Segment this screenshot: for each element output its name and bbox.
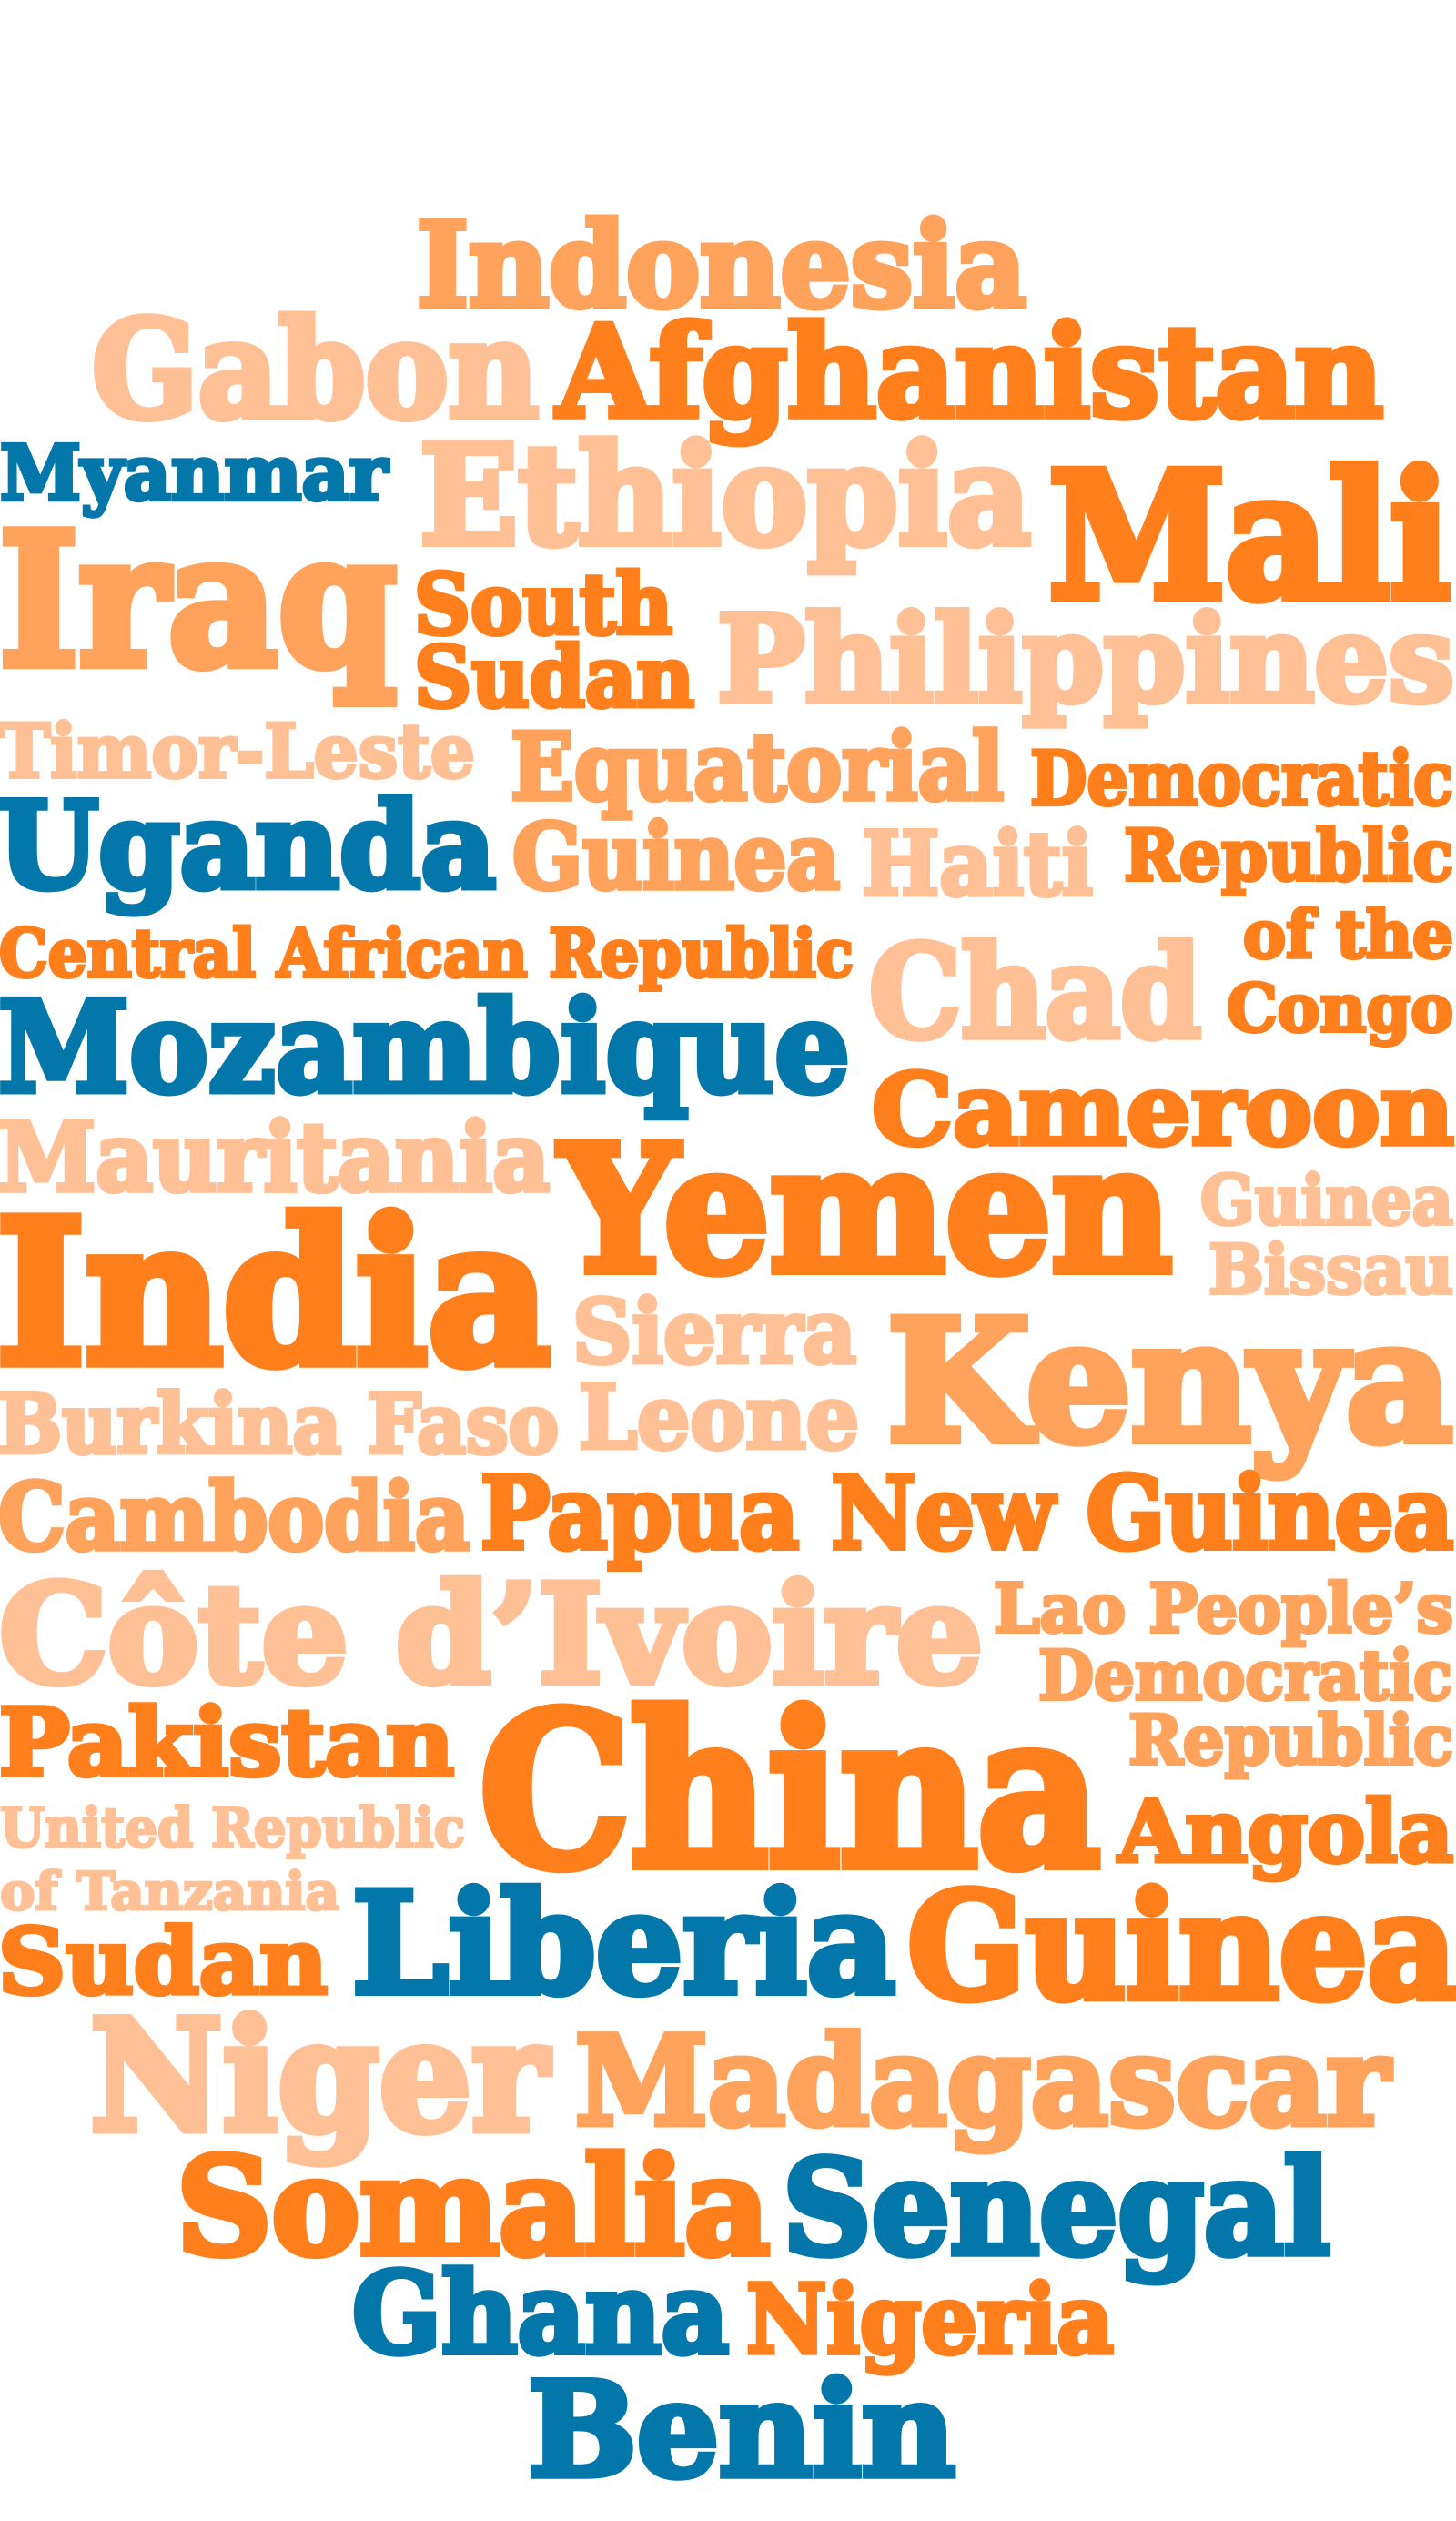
word: Uganda: Uganda <box>0 775 496 916</box>
word: Yemen: Yemen <box>558 1108 1172 1312</box>
word: Chad: Chad <box>869 918 1201 1068</box>
word: China: China <box>480 1668 1100 1915</box>
word: Congo: Congo <box>1227 969 1453 1047</box>
word: Central African Republic: Central African Republic <box>0 915 854 993</box>
word: of the: of the <box>1243 896 1453 973</box>
word: Iraq: Iraq <box>0 493 397 708</box>
word: Senegal: Senegal <box>783 2131 1330 2284</box>
word: Haiti: Haiti <box>862 813 1093 916</box>
word: Burkina Faso: Burkina Faso <box>0 1376 559 1473</box>
word: Philippines: Philippines <box>717 589 1454 729</box>
word: Benin: Benin <box>528 2354 956 2506</box>
word: Niger: Niger <box>90 1986 550 2166</box>
word: Cambodia: Cambodia <box>0 1463 470 1571</box>
word: Cameroon: Cameroon <box>872 1053 1454 1168</box>
word: Mozambique: Mozambique <box>0 973 850 1121</box>
word: Ghana: Ghana <box>352 2249 729 2380</box>
word: South: South <box>414 555 672 653</box>
word: Equatorial: Equatorial <box>511 713 1004 821</box>
word: Nigeria: Nigeria <box>746 2263 1114 2375</box>
word: Somalia: Somalia <box>177 2128 770 2285</box>
word: Liberia: Liberia <box>352 1862 895 2026</box>
word: Leone: Leone <box>579 1366 859 1469</box>
word: Gabon: Gabon <box>92 290 539 449</box>
word: United Republic: United Republic <box>0 1797 465 1860</box>
word: of Tanzania: of Tanzania <box>0 1861 339 1922</box>
word: Bissau: Bissau <box>1208 1230 1453 1310</box>
word: Myanmar: Myanmar <box>0 429 389 518</box>
word: Timor-Leste: Timor-Leste <box>0 709 475 795</box>
word: Sierra: Sierra <box>572 1281 856 1383</box>
word: Côte d'Ivoire: Côte d’Ivoire <box>0 1555 983 1715</box>
word: Indonesia: Indonesia <box>417 197 1026 333</box>
word: Pakistan: Pakistan <box>0 1688 454 1797</box>
word: Madagascar: Madagascar <box>575 2009 1391 2153</box>
word: Mauritania: Mauritania <box>0 1101 550 1213</box>
word: Ethiopia: Ethiopia <box>420 414 1031 576</box>
word: India: India <box>0 1177 551 1410</box>
word: Guinea: Guinea <box>512 805 840 910</box>
word: Afghanistan: Afghanistan <box>555 298 1383 446</box>
word: Sudan: Sudan <box>0 1909 328 2015</box>
word: Angola: Angola <box>1117 1782 1453 1882</box>
word: Sudan (South Sudan): Sudan <box>414 628 694 726</box>
word: Lao People's: Lao People’s <box>994 1570 1453 1648</box>
word: Kenya: Kenya <box>887 1284 1452 1480</box>
